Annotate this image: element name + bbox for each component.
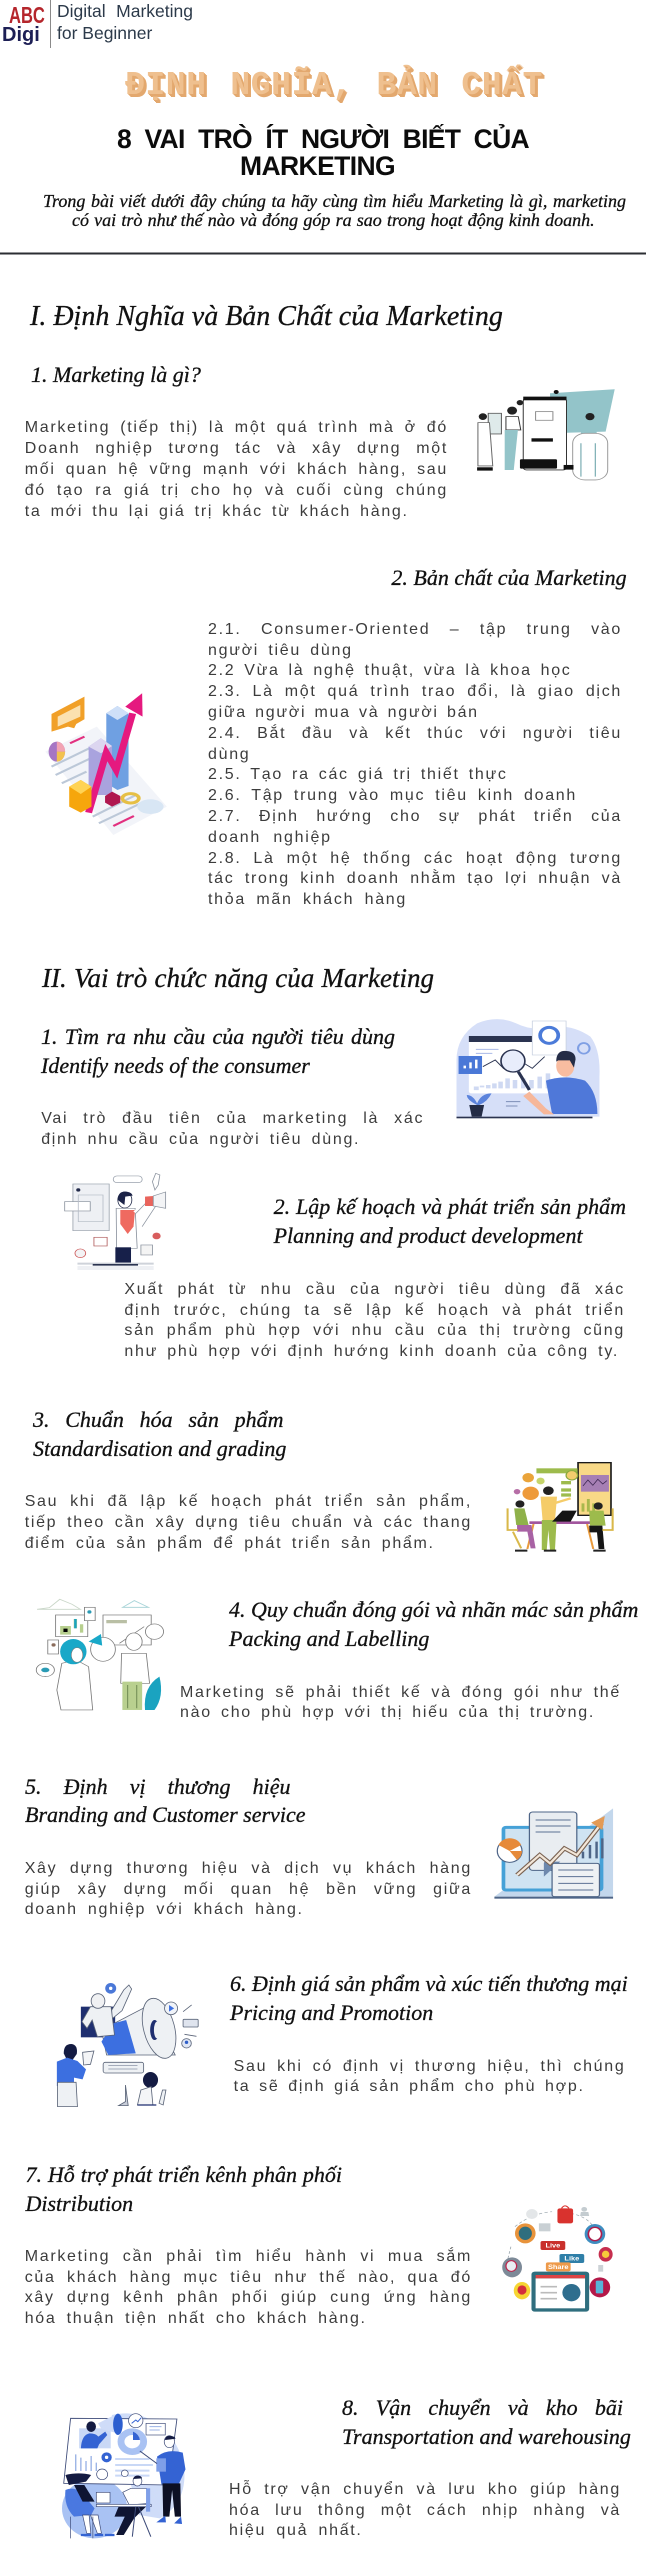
text: marketing definition: mối quan hệ vững mạnh với khách hàng, sau bbox=[25, 461, 448, 478]
role 7 text bbox=[25, 2247, 472, 2327]
text: nature of marketing list: doanh nghiệp bbox=[208, 829, 332, 846]
role 1 heading: Identify needs of the consumer bbox=[41, 1053, 310, 1078]
role 7 text: hóa thuận tiện nhất cho khách hàng. bbox=[25, 2310, 367, 2327]
logo tagline bbox=[57, 1, 193, 43]
role 6 text bbox=[234, 2058, 625, 2095]
text: nature of marketing list: giữa người mua và người bán bbox=[208, 704, 479, 721]
role 3 heading: Standardisation and grading bbox=[33, 1436, 286, 1461]
role 2 heading: 2. Lập kế hoạch và phát triển sản phẩm bbox=[274, 1194, 626, 1219]
role 5 heading: Branding and Customer service bbox=[25, 1802, 305, 1827]
illustration: analyst with magnifier bbox=[456, 1019, 600, 1118]
role 3 heading bbox=[32, 1407, 286, 1461]
intro text: Trong bài viết dưới đây chúng ta hãy cùng tìm hiểu Marketing là gì, marketing bbox=[43, 191, 626, 211]
role 7 heading bbox=[25, 2162, 342, 2216]
subheading: Marketing là gì: 1. Marketing là gì? bbox=[31, 362, 201, 387]
text: marketing definition: ta mới thu lại giá trị khác từ khách hàng. bbox=[25, 503, 409, 520]
intro text bbox=[43, 191, 626, 230]
role 5 heading: 5. Định vị thương hiệu bbox=[25, 1774, 290, 1798]
role 6 text: Sau khi có định vị thương hiệu, thì chúng bbox=[234, 2058, 625, 2074]
text: nature of marketing list: 2.1. Consumer-Oriented – tập trung vào bbox=[208, 621, 622, 638]
illustration: packaging brainstorm bbox=[36, 1599, 164, 1710]
role 5 text: doanh nghiệp với khách hàng. bbox=[25, 1901, 304, 1918]
role 6 heading bbox=[230, 1971, 628, 2025]
role 3 text: tiếp theo cần xây dựng tiêu chuẩn và các thang bbox=[25, 1514, 472, 1531]
role 5 heading bbox=[25, 1774, 306, 1827]
text: nature of marketing list: 2.4. Bắt đầu và kết thúc với người tiêu bbox=[208, 725, 622, 742]
role 1 heading bbox=[40, 1024, 395, 1078]
illustration: digital marketing icons: Share bbox=[548, 2265, 569, 2271]
role 2 text bbox=[124, 1281, 625, 1360]
role 5 text: Xây dựng thương hiệu và dịch vụ khách hàng bbox=[25, 1860, 472, 1877]
role 3 heading: 3. Chuẩn hóa sản phẩm bbox=[33, 1407, 284, 1432]
role 3 text: điểm của sản phẩm để phát triển sản phẩm. bbox=[25, 1535, 435, 1552]
role 2 text: Xuất phát từ nhu cầu của người tiêu dùng đã xác bbox=[124, 1281, 625, 1298]
role 8 heading bbox=[342, 2395, 631, 2449]
role 4 heading bbox=[228, 1597, 638, 1651]
title: 8 VAI TRÒ ÍT NGƯỜI BIẾT CỦA bbox=[117, 124, 529, 154]
text: nature of marketing list: 2.3. Là một quá trình trao đổi, là giao dịch bbox=[208, 683, 622, 700]
role 6 heading: 6. Định giá sản phẩm và xúc tiến thương mại bbox=[230, 1971, 628, 1996]
illustration: digital marketing icons bbox=[502, 2206, 613, 2312]
logo: ABC Digi: Digi bbox=[2, 24, 40, 46]
text: nature of marketing list: dùng bbox=[208, 746, 250, 763]
text: nature of marketing list: tác trong kinh doanh nhằm tạo lợi nhuận và bbox=[208, 870, 622, 887]
role 8 heading: Transportation and warehousing bbox=[342, 2424, 631, 2449]
logo: ABC Digi bbox=[2, 2, 45, 46]
role 3 text bbox=[25, 1493, 472, 1552]
illustration: digital marketing icons: Like bbox=[564, 2256, 580, 2262]
role 4 heading: Packing and Labelling bbox=[229, 1626, 429, 1651]
illustration: megaphone campaign bbox=[57, 1983, 198, 2107]
role 7 text: của khách hàng mục tiêu như thế nào, qua đó bbox=[25, 2269, 472, 2286]
role 4 heading: 4. Quy chuẩn đóng gói và nhãn mác sản phẩm bbox=[229, 1597, 638, 1622]
text: marketing definition: Marketing (tiếp thị) là một quá trình mà ở đó bbox=[25, 419, 448, 436]
section heading II: II. Vai trò chức năng của Marketing bbox=[42, 963, 434, 993]
subheading: Bản chất: 2. Bản chất của Marketing bbox=[391, 565, 627, 590]
text: nature of marketing list: 2.7. Định hướng cho sự phát triển của bbox=[208, 808, 622, 825]
text: nature of marketing list: 2.8. Là một hệ thống các hoạt động tương bbox=[208, 850, 622, 867]
role 8 heading: 8. Vận chuyển và kho bãi bbox=[342, 2395, 623, 2420]
illustration: team meeting bbox=[508, 1463, 613, 1551]
role 3 text: Sau khi đã lập kế hoạch phát triển sản phẩm, bbox=[25, 1493, 472, 1510]
text: nature of marketing list: 2.5. Tạo ra các giá trị thiết thực bbox=[208, 766, 508, 783]
role 5 text bbox=[25, 1860, 472, 1918]
illustration: digital marketing icons: Live bbox=[545, 2243, 561, 2249]
role 5 text: giúp xây dựng mối quan hệ bền vững giữa bbox=[25, 1881, 472, 1898]
logo: ABC Digi: ABC bbox=[9, 2, 45, 28]
illustration: report with rising arrow bbox=[494, 1808, 613, 1899]
text: nature of marketing list: 2.2 Vừa là nghệ thuật, vừa là khoa học bbox=[208, 662, 572, 679]
logo tagline: for Beginner bbox=[57, 23, 152, 43]
role 8 text bbox=[229, 2480, 621, 2539]
heading: peach display title: ĐỊNH NGHĨA, BẢN CHẤT bbox=[125, 67, 543, 104]
role 2 text: như phù hợp với định hướng kinh doanh của công ty. bbox=[124, 1343, 619, 1360]
role 2 heading: Planning and product development bbox=[274, 1223, 583, 1248]
role 4 text: nào cho phù hợp với thị hiếu của thị trường. bbox=[180, 1704, 595, 1721]
role 2 heading bbox=[273, 1194, 626, 1248]
role 2 text: định trước, chúng ta sẽ lập kế hoạch và phát triển bbox=[124, 1302, 625, 1319]
header rule bbox=[0, 252, 646, 254]
logo tagline: Digital Marketing bbox=[57, 1, 193, 21]
role 7 heading: Distribution bbox=[26, 2191, 133, 2216]
illustration: isometric growth chart bbox=[45, 693, 167, 835]
role 4 text: Marketing sẽ phải thiết kế và đóng gói như thế bbox=[180, 1684, 621, 1700]
role 1 text: Vai trò đầu tiên của marketing là xác bbox=[41, 1110, 424, 1127]
role 7 text: xây dựng kênh phân phối giúp cung ứng hàng bbox=[25, 2289, 472, 2306]
role 1 text: định nhu cầu của người tiêu dùng. bbox=[41, 1131, 360, 1148]
text: marketing definition: đó tạo ra giá trị cho họ và cuối cùng chúng bbox=[25, 482, 448, 499]
role 4 text bbox=[180, 1684, 621, 1721]
role 1 heading: 1. Tìm ra nhu cầu của người tiêu dùng bbox=[41, 1024, 395, 1049]
role 7 text: Marketing cần phải tìm hiểu hành vi mua sắm bbox=[25, 2248, 472, 2265]
illustration: promoter with megaphone bbox=[65, 1173, 166, 1270]
text: nature of marketing list: người tiêu dùng bbox=[208, 642, 353, 659]
text: nature of marketing list: thỏa mãn khách hàng bbox=[208, 891, 407, 908]
title bbox=[117, 124, 529, 181]
illustration: logistics team presentation bbox=[62, 2413, 185, 2538]
role 1 text bbox=[41, 1110, 424, 1148]
intro text: có vai trò như thế nào và đóng góp ra sao trong hoạt động kinh doanh. bbox=[72, 210, 595, 230]
text: nature of marketing list bbox=[208, 621, 622, 908]
text: nature of marketing list: 2.6. Tập trung vào mục tiêu kinh doanh bbox=[208, 787, 577, 804]
role 6 text: ta sẽ định giá sản phẩm cho phù hợp. bbox=[234, 2078, 585, 2095]
role 8 text: hóa lưu thông một cách nhịp nhàng và bbox=[229, 2502, 621, 2519]
text: marketing definition bbox=[25, 419, 448, 520]
role 8 text: Hỗ trợ vận chuyển và lưu kho giúp hàng bbox=[229, 2481, 621, 2498]
title: MARKETING bbox=[240, 151, 395, 181]
text: marketing definition: Doanh nghiệp tương tác và xây dựng một bbox=[25, 440, 448, 457]
illustration: online shopping team bbox=[477, 389, 615, 480]
role 7 heading: 7. Hỗ trợ phát triển kênh phân phối bbox=[26, 2162, 342, 2187]
role 2 text: sản phẩm phù hợp với nhu cầu của thị trường cũng bbox=[124, 1322, 625, 1339]
logo divider bbox=[50, 0, 51, 48]
section heading I: I. Định Nghĩa và Bản Chất của Marketing bbox=[30, 301, 503, 332]
role 6 heading: Pricing and Promotion bbox=[230, 2000, 433, 2025]
role 8 text: hiệu quả nhất. bbox=[229, 2522, 363, 2539]
